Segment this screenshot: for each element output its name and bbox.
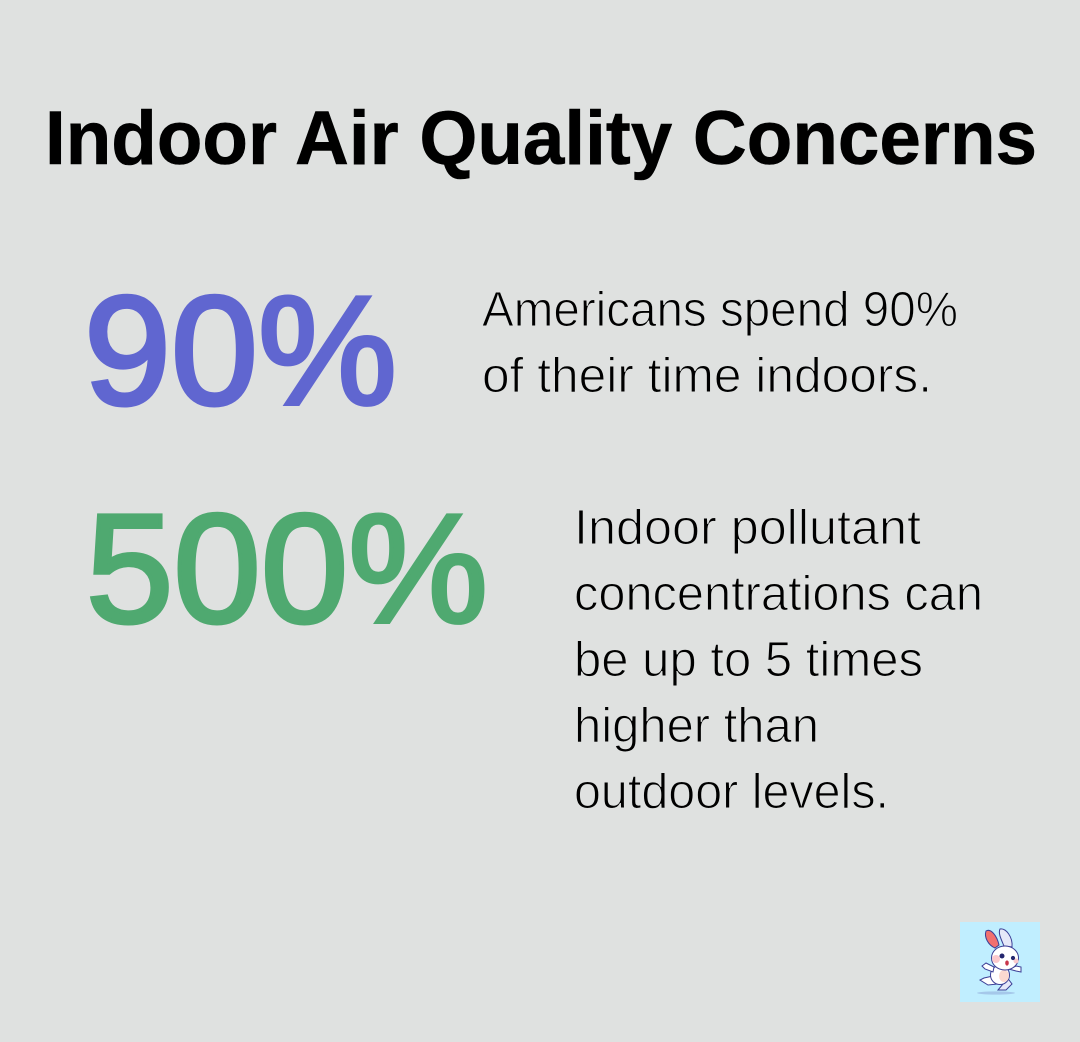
body: [990, 966, 1010, 984]
stat description: pollutant concentrations: outdoor levels.: [574, 765, 889, 819]
stat description: time indoors: of their time indoors.: [482, 349, 932, 403]
stat description: pollutant concentrations: concentrations can: [574, 567, 983, 621]
stat description: pollutant concentrations: Indoor pollutant: [574, 501, 921, 555]
title: Indoor Air Quality Concerns: [45, 96, 1037, 181]
stat description: time indoors: Americans spend 90%: [482, 283, 958, 337]
stat description: pollutant concentrations: be up to 5 times: [574, 633, 923, 687]
stat description: pollutant concentrations: [574, 501, 983, 819]
stat value: 90%: 90%: [84, 264, 397, 437]
stat description: time indoors: [482, 283, 958, 403]
legs: [980, 976, 998, 985]
icon: running rabbit logo: [960, 922, 1040, 1002]
right ear: [999, 929, 1012, 947]
arms: [982, 963, 994, 972]
stat value: 500%: 500%: [86, 482, 488, 655]
stat: 500%: [86, 482, 983, 819]
stat: 90%: [84, 264, 958, 437]
head: [992, 946, 1018, 970]
left ear: [985, 930, 999, 948]
stat description: pollutant concentrations: higher than: [574, 699, 819, 753]
